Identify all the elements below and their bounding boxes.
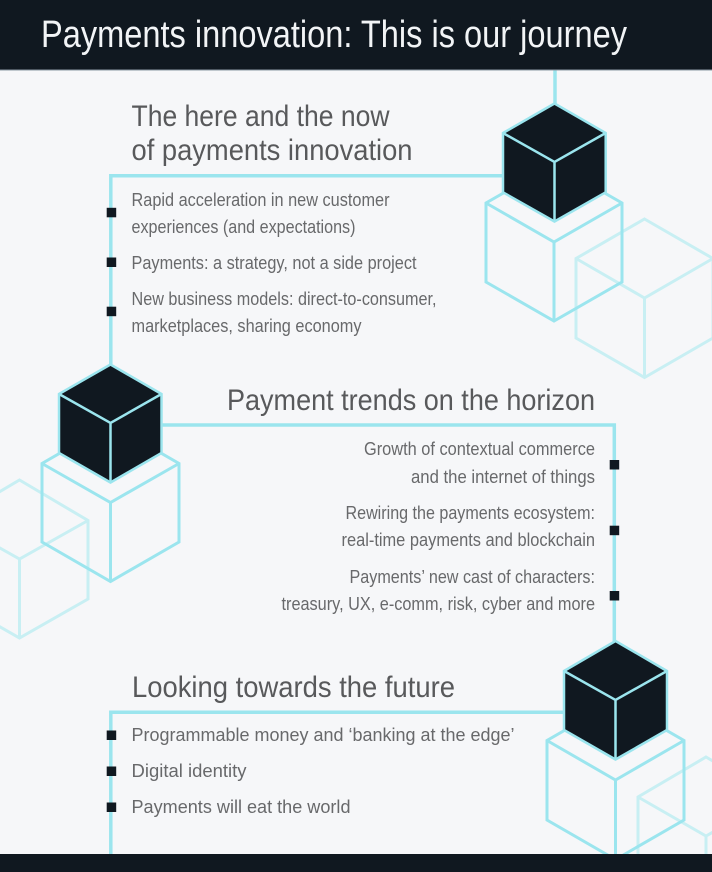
title: Payments innovation: This is our journey: [41, 14, 627, 56]
light outline cube three: [547, 701, 684, 860]
section: the here and the now: [107, 100, 436, 336]
bullet list one: experiences (and expectations): [132, 216, 356, 237]
bullet list three: Payments will eat the world: [132, 796, 350, 817]
bullet list two: Rewiring the payments ecosystem:: [346, 502, 595, 523]
bullet list three: Programmable money and ‘banking at the edge’: [132, 724, 514, 745]
connector path: journey line: [111, 70, 614, 855]
bullet list two: Payments’ new cast of characters:: [350, 566, 595, 587]
dark cube one: [503, 104, 606, 222]
bullet list one: New business models: direct-to-consumer,: [132, 288, 436, 309]
header bar: [0, 0, 712, 70]
section: looking towards the future: [107, 671, 514, 817]
pale outline cube two: [0, 480, 88, 638]
heading one: [132, 100, 412, 167]
icon: cube stack one: [486, 104, 712, 378]
heading two: Payment trends on the horizon: [227, 384, 595, 417]
bullet list two: Growth of contextual commerce: [364, 438, 595, 459]
heading one: The here and the now: [132, 100, 390, 133]
bullet list one: marketplaces, sharing economy: [132, 315, 362, 336]
bullet list two: [282, 438, 619, 614]
bullet list three: Digital identity: [132, 760, 247, 781]
bullet list two: treasury, UX, e-comm, risk, cyber and more: [282, 593, 595, 614]
bullet list one: [107, 189, 436, 336]
dark cube three: [564, 641, 667, 760]
icon: cube stack two: [0, 364, 179, 638]
section: payment trends on the horizon: [227, 384, 619, 614]
light outline cube one: [486, 164, 622, 321]
pale outline cube one: [576, 219, 712, 378]
bullet list one: Payments: a strategy, not a side project: [132, 252, 416, 273]
pale outline cube three: [638, 757, 712, 872]
bullet list two: real-time payments and blockchain: [342, 529, 595, 550]
footer bar: [0, 854, 712, 872]
heading three: Looking towards the future: [132, 671, 455, 704]
light outline cube two: [42, 424, 179, 582]
icon: cube stack three: [547, 641, 712, 872]
bullet list two: and the internet of things: [411, 466, 595, 487]
bullet list three: [107, 724, 514, 817]
bullet list one: Rapid acceleration in new customer: [132, 189, 390, 210]
heading one: of payments innovation: [132, 134, 412, 167]
dark cube two: [59, 364, 162, 482]
